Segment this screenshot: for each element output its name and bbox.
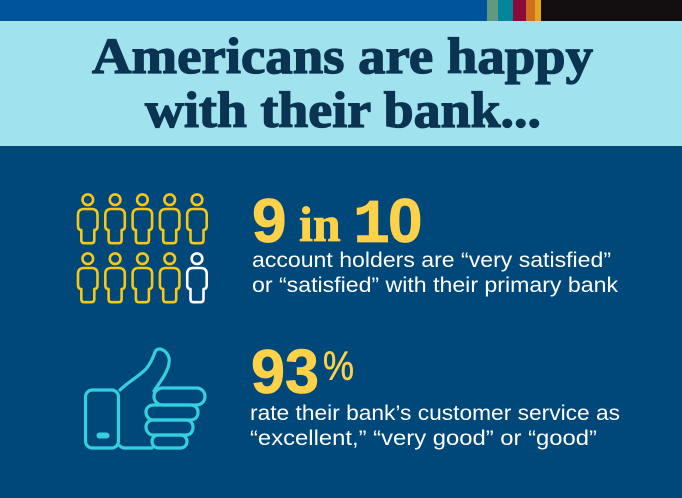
stat: 93%: 93 bbox=[251, 338, 319, 407]
title bbox=[92, 29, 593, 139]
icon: ten people, nine highlighted bbox=[78, 194, 207, 302]
stat: 9 in 10: 9 bbox=[252, 187, 286, 256]
text: satisfaction description bbox=[252, 249, 619, 297]
title: with their bank... bbox=[145, 83, 541, 139]
top colour bar bbox=[0, 0, 682, 21]
icon: thumbs up bbox=[86, 349, 205, 448]
stat: 93%: % bbox=[323, 343, 354, 389]
stat: 9 in 10: in bbox=[299, 196, 341, 252]
title band bbox=[0, 21, 682, 146]
title: Americans are happy bbox=[92, 29, 593, 85]
stat: 9 in 10: 0 bbox=[388, 187, 422, 256]
stat: 9 in 10: 1 bbox=[353, 190, 390, 261]
stat: 93% bbox=[251, 338, 354, 407]
text: satisfaction description: or “satisfied” with their primary bank bbox=[252, 274, 619, 297]
text: customer service description: rate their bank’s customer service as bbox=[250, 402, 620, 425]
text: customer service description bbox=[250, 402, 620, 450]
text: customer service description: “excellent,” “very good” or “good” bbox=[250, 427, 597, 450]
text: satisfaction description: account holders are “very satisfied” bbox=[252, 249, 611, 272]
